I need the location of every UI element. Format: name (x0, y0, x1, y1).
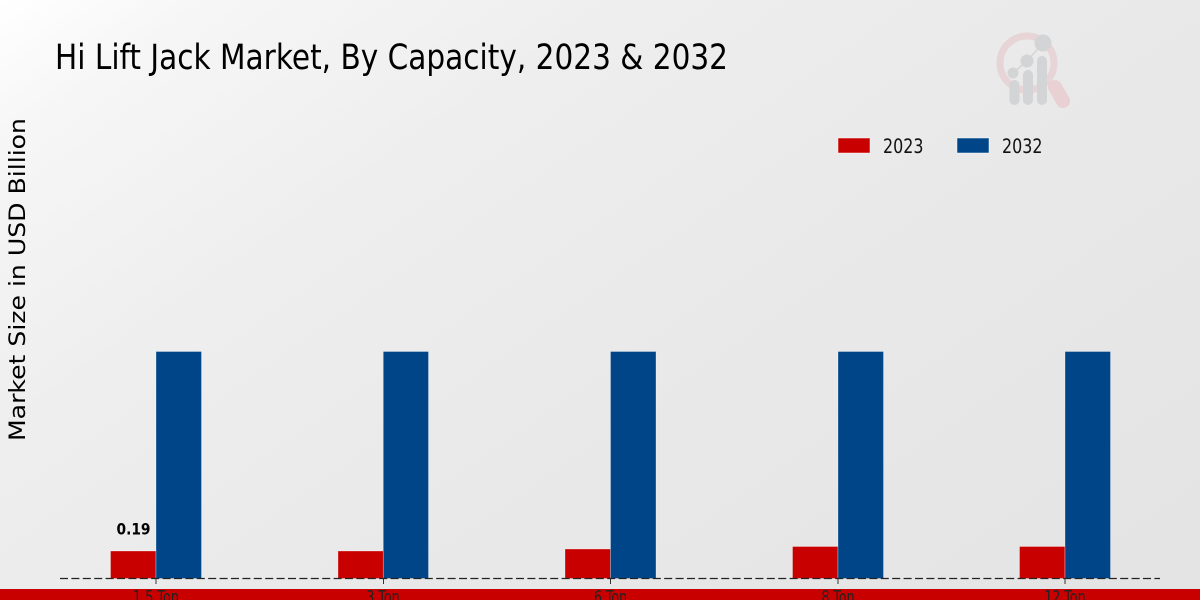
legend: 2023 swatch (838, 138, 870, 153)
x axis labels (133, 587, 1086, 600)
bar chart (110, 352, 1110, 578)
group: 8 Ton (792, 352, 884, 578)
legend: 2032 label: 2032 (1002, 135, 1042, 158)
baseline (60, 578, 1160, 580)
group: 6 Ton (565, 352, 656, 578)
group: 12 Ton (1020, 352, 1110, 578)
legend: 2032 swatch (957, 138, 989, 153)
title: Hi Lift Jack Market, By Capacity, 2023 & 2032 (55, 38, 728, 78)
footer band (0, 589, 1200, 600)
legend: 2023 label: 2023 (883, 135, 924, 158)
legend (838, 135, 1042, 158)
y axis title: Market Size in USD Billion (5, 118, 31, 441)
group: 3 Ton (338, 352, 428, 578)
data label: 0.19 (116, 520, 150, 538)
icon: watermark logo (1000, 34, 1063, 105)
group: 1.5 Ton (110, 352, 202, 578)
